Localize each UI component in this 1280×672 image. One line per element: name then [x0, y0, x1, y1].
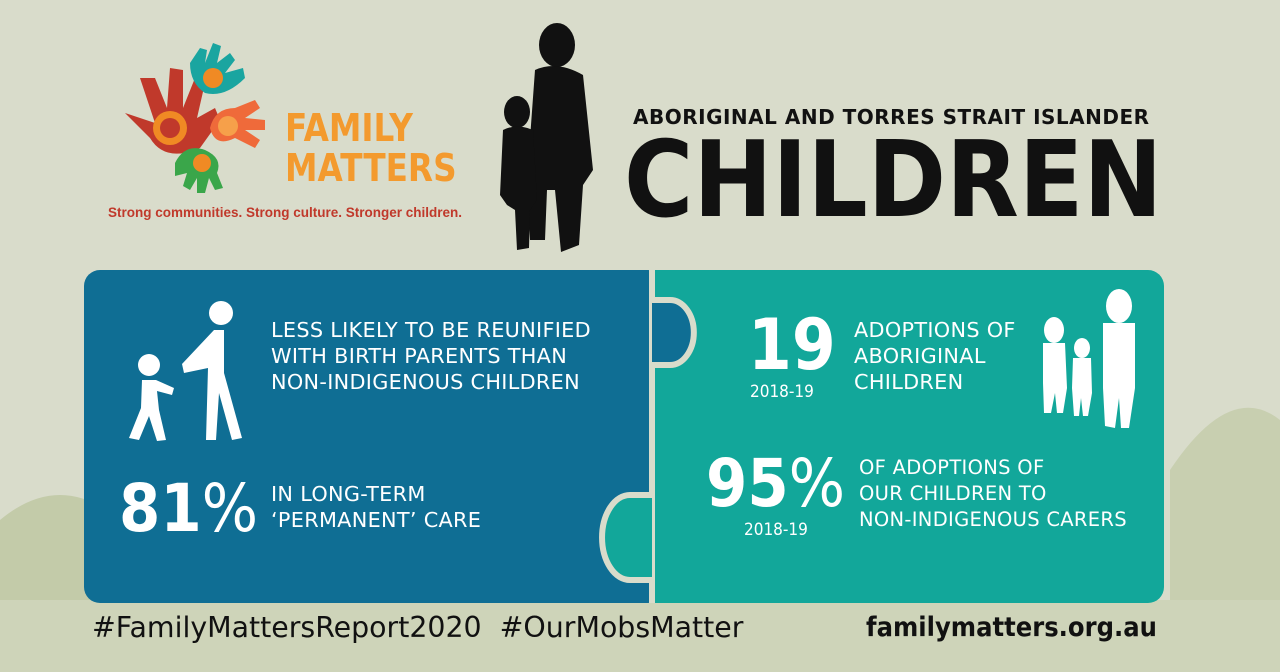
text: non-indigenous carers: NON-INDIGENOUS CARERS	[859, 508, 1127, 531]
panel: adoptions (teal)	[706, 289, 1135, 540]
panel: reunification (blue)	[119, 301, 591, 547]
subtitle: ABORIGINAL AND TORRES STRAIT ISLANDER	[633, 105, 1150, 129]
text: non-indigenous carers: OF ADOPTIONS OF	[859, 456, 1044, 479]
text: less likely: WITH BIRTH PARENTS THAN	[271, 344, 567, 368]
text: less likely: LESS LIKELY TO BE REUNIFIED	[271, 318, 591, 342]
year label: 2018-19	[744, 520, 808, 540]
text: adoptions	[854, 318, 1016, 394]
text: non-indigenous carers: OUR CHILDREN TO	[859, 482, 1047, 505]
text: long-term	[271, 482, 481, 532]
icon: three children	[1043, 289, 1135, 428]
logo wordmark: FAMILY	[285, 106, 413, 150]
text: adoptions: ABORIGINAL	[854, 344, 986, 368]
year label: 2018-19	[750, 382, 814, 402]
icon: adult and child	[129, 301, 242, 441]
icon: silhouette of two children	[500, 23, 593, 252]
title: CHILDREN	[624, 119, 1162, 241]
tagline: Strong communities. Strong culture. Stronger children.	[108, 205, 462, 220]
logo: family matters	[108, 43, 462, 220]
text: adoptions: CHILDREN	[854, 370, 963, 394]
logo wordmark	[285, 106, 457, 190]
website: familymatters.org.au	[866, 612, 1157, 643]
stat: 19: 19	[748, 304, 836, 386]
text: non-indigenous carers	[859, 456, 1127, 531]
icon: hands	[125, 43, 265, 193]
text: long-term: ‘PERMANENT’ CARE	[271, 508, 481, 532]
text: adoptions: ADOPTIONS OF	[854, 318, 1016, 342]
stat: 81%: 81%	[119, 470, 258, 547]
hashtags: #FamilyMattersReport2020 #OurMobsMatter	[92, 611, 743, 644]
text: less likely: NON-INDIGENOUS CHILDREN	[271, 370, 580, 394]
stat: 95%: 95%	[706, 445, 845, 522]
text: long-term: IN LONG-TERM	[271, 482, 426, 506]
text: less likely	[271, 318, 591, 394]
logo wordmark: MATTERS	[285, 146, 457, 190]
